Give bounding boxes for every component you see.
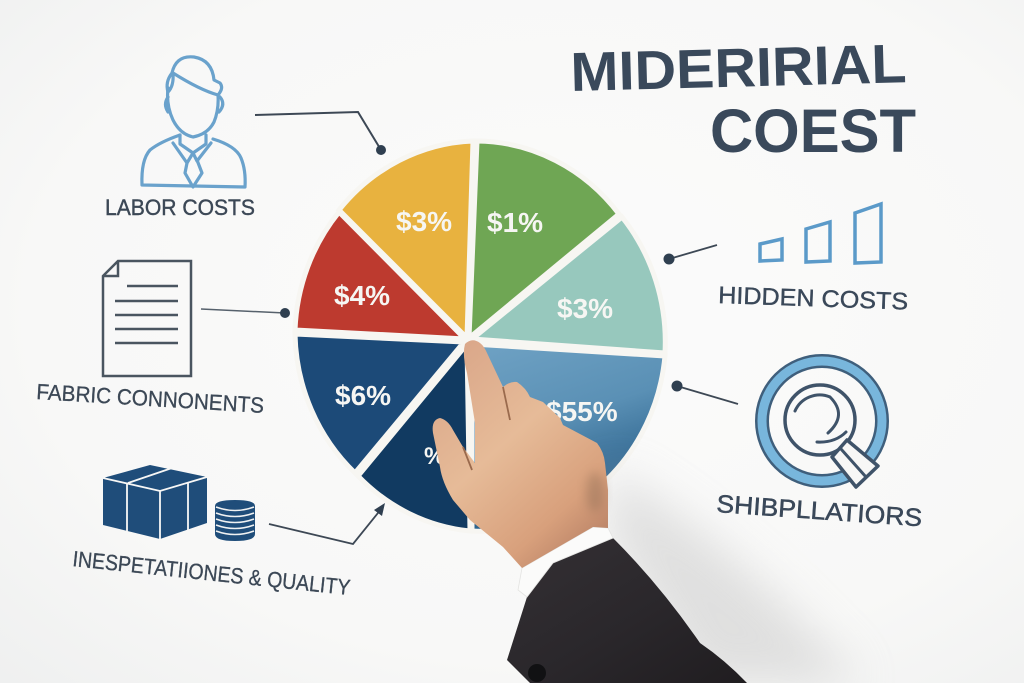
connector: fabric [201, 308, 290, 318]
sleeve button [528, 664, 546, 682]
connector: labor [255, 112, 386, 155]
pie labels: $55% [546, 396, 618, 427]
slice: navy left [295, 334, 464, 473]
pie labels: $3% [557, 293, 613, 324]
pie labels: $3% [396, 206, 452, 237]
title [570, 32, 916, 165]
title: COEST [710, 97, 916, 165]
icon: hidden bars [760, 204, 881, 263]
slice: light blue [472, 344, 665, 531]
pie labels: $1% [487, 207, 543, 238]
icon: magnifier [762, 361, 882, 487]
pie labels: % [424, 443, 445, 470]
arm shadow [608, 470, 860, 683]
hand [433, 340, 747, 683]
suit sleeve [507, 538, 747, 683]
connector: inspections [269, 503, 385, 544]
label: hidden costs: HIDDEN COSTS [718, 282, 909, 316]
hand shape [433, 340, 608, 568]
icon: labor person [142, 57, 245, 187]
finger crease [463, 387, 510, 470]
pie labels: $4% [334, 280, 390, 311]
label: shipping: SHIBPLLATIORS [716, 490, 923, 532]
shirt cuff [518, 527, 613, 597]
pie labels [334, 206, 618, 470]
pie labels: $6% [335, 380, 391, 411]
connector: hidden [664, 245, 717, 264]
knuckle shading [586, 472, 604, 512]
slice: green [469, 141, 619, 338]
label: fabric: FABRIC CONNONENTS [36, 379, 265, 418]
pie chart [295, 141, 665, 531]
icon: boxes and coins [103, 465, 255, 541]
connector: ship [672, 380, 738, 404]
slice: teal [472, 217, 665, 353]
slice: red [295, 212, 465, 339]
slice: yellow [339, 141, 473, 338]
label: labor costs: LABOR COSTS [105, 195, 255, 220]
label: inspections: INESPETATIIONES & QUALITY [71, 546, 352, 600]
slice: dark blue bottom [358, 344, 470, 531]
title: MIDERIRIAL [570, 32, 907, 103]
icon: document [103, 261, 191, 376]
